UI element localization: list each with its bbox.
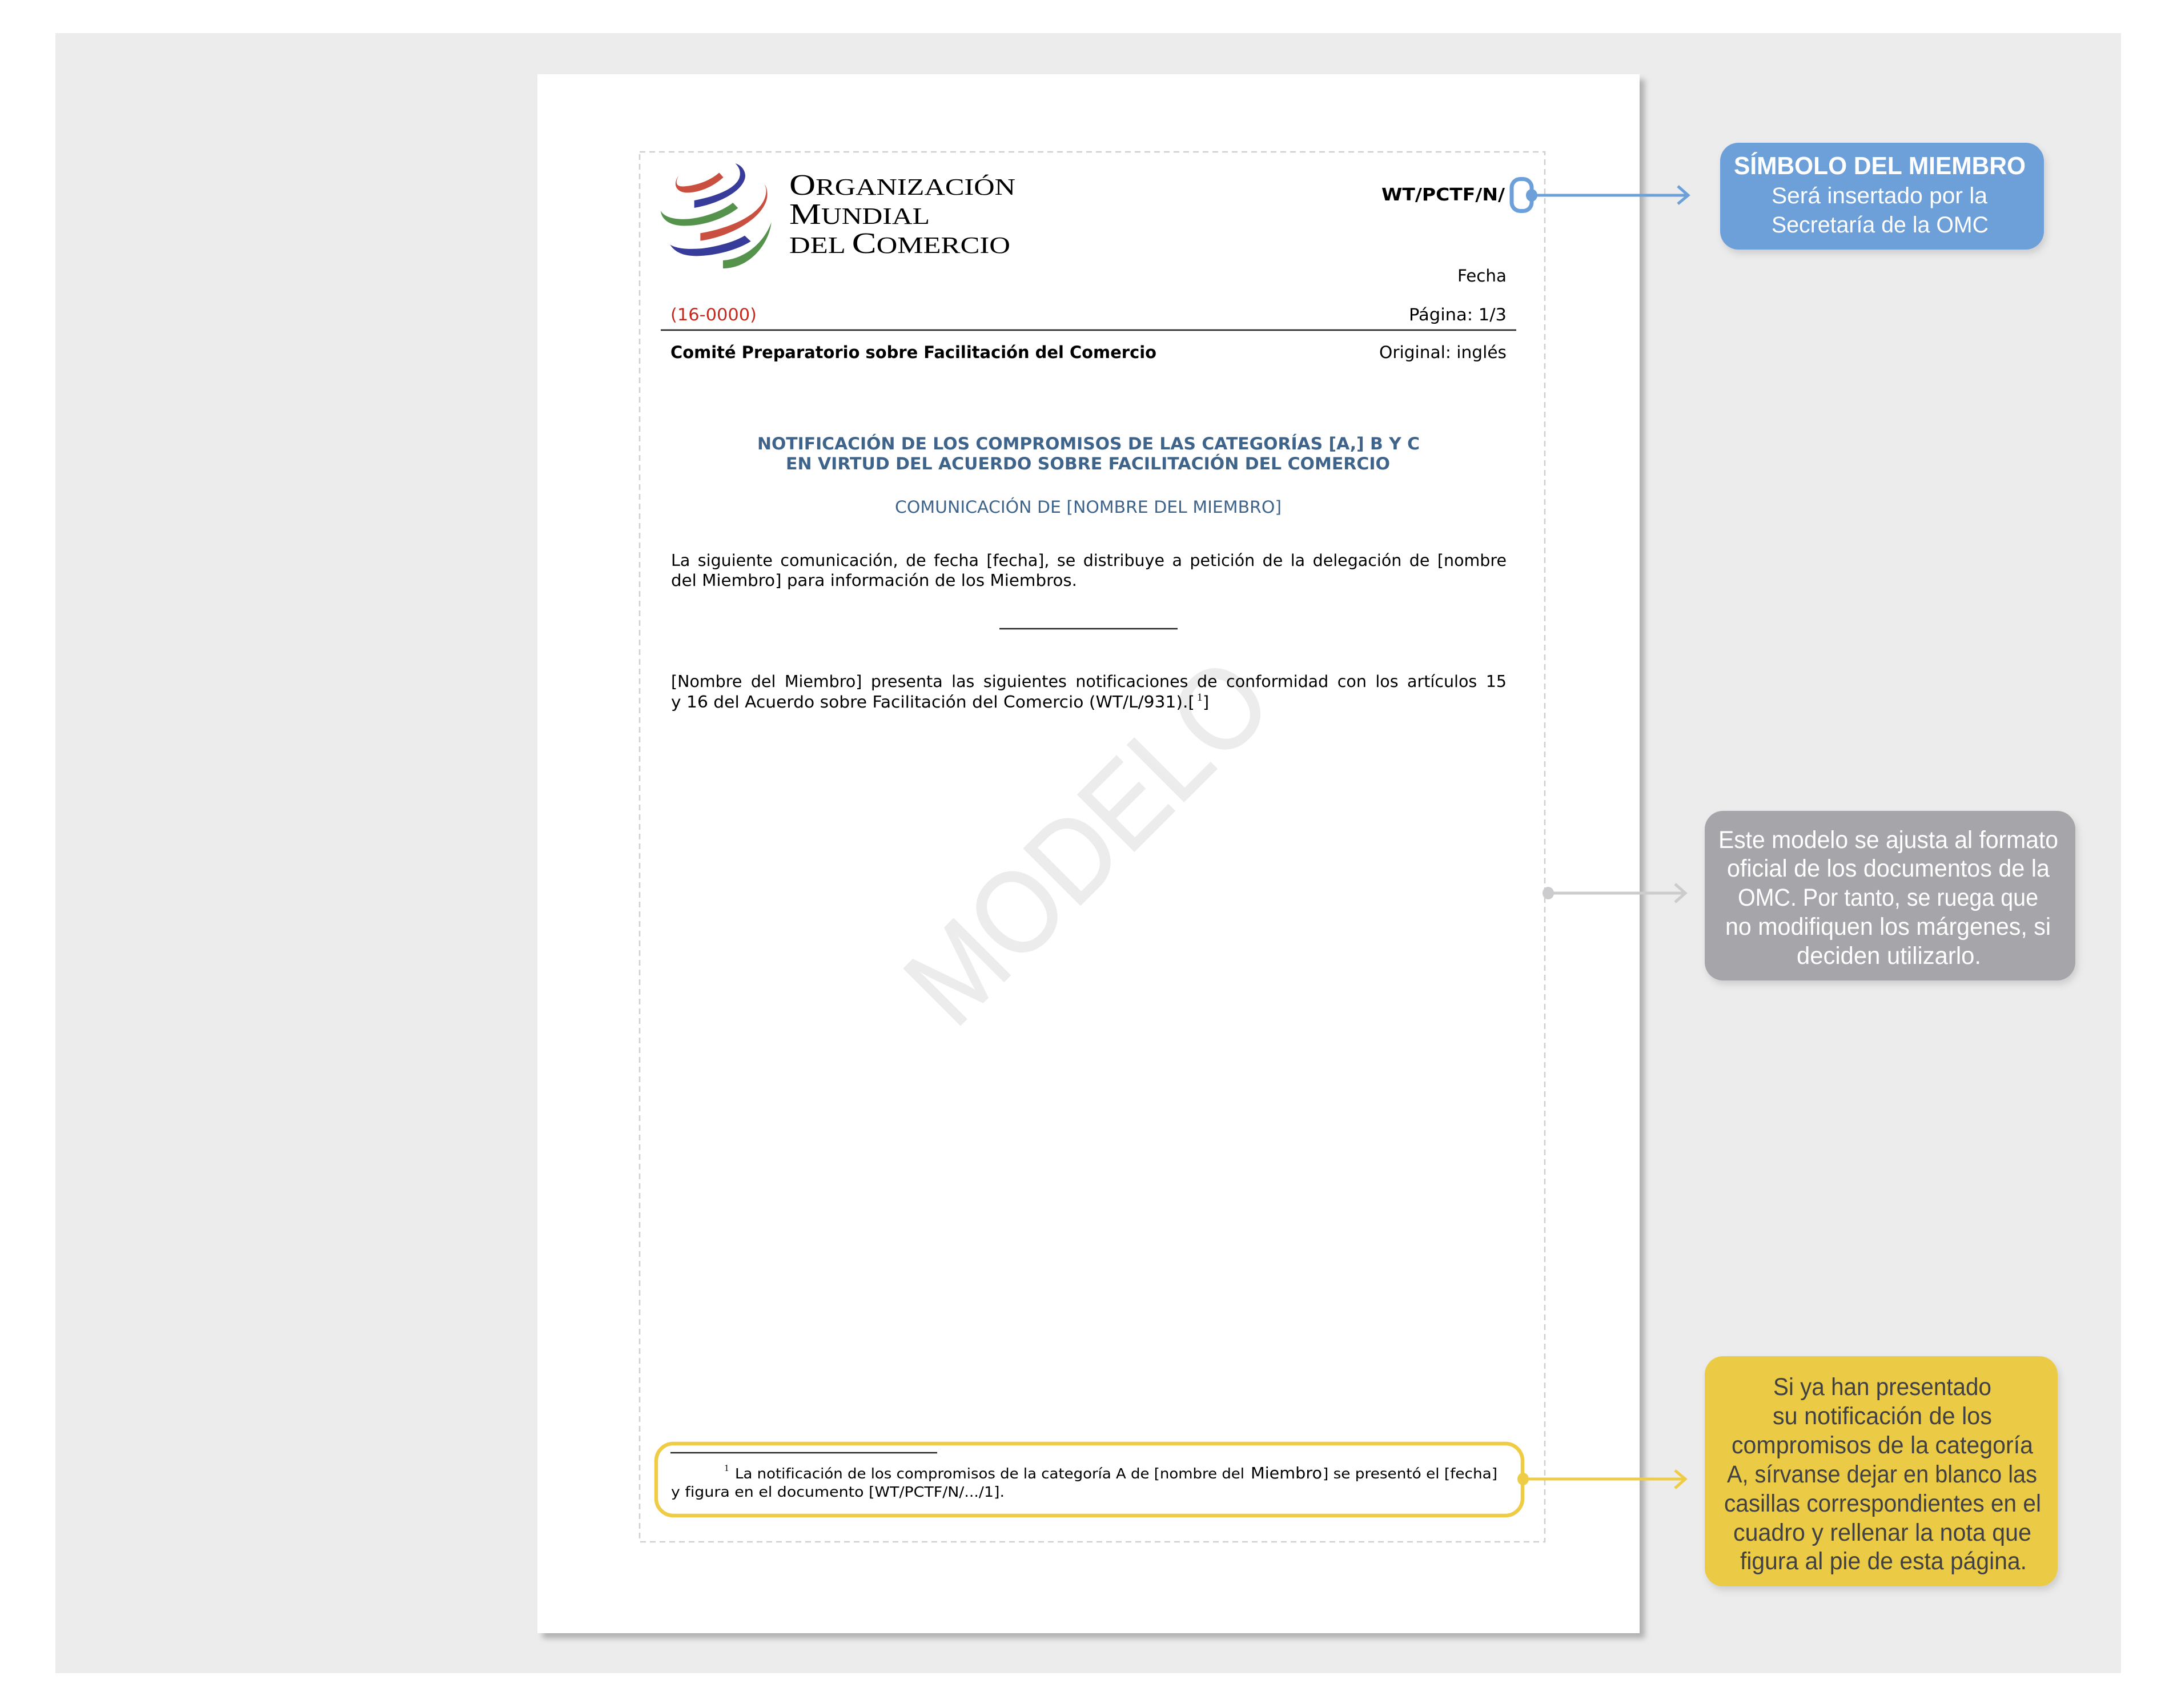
- callout: member symbol: Será insertado por la: [1772, 183, 1988, 208]
- callout: margins note: deciden utilizarlo.: [1797, 942, 1981, 970]
- notification paragraph last line: y 16 del Acuerdo sobre Facilitación del Comercio (WT/L/931).[: [671, 693, 1195, 712]
- callout: category A note: Si ya han presentado: [1773, 1373, 1991, 1401]
- WTO logo: [661, 163, 1015, 268]
- callout: margins note: oficial de los documentos de la: [1727, 855, 2050, 882]
- document title: EN VIRTUD DEL ACUERDO SOBRE FACILITACIÓN DEL COMERCIO: [786, 454, 1390, 473]
- callout: category A note: casillas correspondientes en el: [1724, 1490, 2041, 1517]
- callout: member symbol: Secretaría de la OMC: [1772, 212, 1989, 238]
- notification paragraph last line: ]: [1203, 693, 1209, 712]
- footnote text: y figura en el documento [WT/PCTF/N/.../1].: [671, 1484, 1005, 1500]
- dashed margin frame: [640, 152, 1545, 1542]
- organisation name: ORGANIZACIÓN: [789, 169, 1015, 202]
- notification paragraph last line: 1: [1197, 692, 1203, 704]
- arrow: member symbol bracket to blue callout: [1512, 179, 1688, 211]
- original language: Original: inglés: [1379, 343, 1507, 362]
- organisation name: [789, 169, 1015, 260]
- document symbol: WT/PCTF/N/: [1381, 185, 1505, 205]
- callout: margins note: OMC. Por tanto, se ruega que: [1738, 884, 2038, 911]
- footnote text: [671, 1462, 1497, 1500]
- intro paragraph last line: del Miembro] para información de los Miembros.: [671, 571, 1077, 590]
- footnote text: La notificación de los compromisos de la categoría A de [nombre del: [735, 1465, 1244, 1482]
- callout: category A note: [1705, 1356, 2058, 1586]
- footnote text: ] se presentó el [fecha]: [1323, 1465, 1497, 1482]
- footnote text: 1: [724, 1462, 729, 1473]
- arrow: margin frame to grey callout: [1543, 884, 1685, 902]
- date: Fecha: [1457, 266, 1507, 286]
- watermark: MODELO: MODELO: [880, 634, 1295, 1049]
- callout: margins note: Este modelo se ajusta al formato: [1718, 826, 2058, 854]
- page number: Página: 1/3: [1409, 305, 1507, 324]
- callout: category A note: A, sírvanse dejar en blanco las: [1727, 1461, 2037, 1488]
- footnote highlight box: [656, 1444, 1523, 1516]
- committee name: Comité Preparatorio sobre Facilitación del Comercio: [670, 343, 1156, 362]
- icon: WTO globe ribbons: [661, 163, 772, 268]
- callout: member symbol: [1720, 143, 2044, 250]
- intro paragraph first line: La siguiente comunicación, de fecha [fecha], se distribuye a petición de la delegación de [nombre: [671, 551, 1507, 570]
- callout: category A note: cuadro y rellenar la nota que: [1733, 1519, 2031, 1546]
- callout: margins note: [1705, 811, 2075, 980]
- callout: member symbol: SÍMBOLO DEL MIEMBRO: [1734, 151, 2026, 180]
- document page: [537, 74, 1640, 1633]
- communication subtitle: COMUNICACIÓN DE [NOMBRE DEL MIEMBRO]: [895, 497, 1282, 517]
- callout: category A note: figura al pie de esta página.: [1740, 1548, 2027, 1575]
- arrow: footnote to yellow callout: [1517, 1470, 1685, 1488]
- document title: NOTIFICACIÓN DE LOS COMPROMISOS DE LAS CATEGORÍAS [A,] B Y C: [757, 434, 1420, 453]
- notification paragraph first line: [Nombre del Miembro] presenta las siguientes notificaciones de conformidad con los artículos 15: [671, 672, 1507, 691]
- document number: (16-0000): [670, 305, 757, 324]
- organisation name: DEL COMERCIO: [789, 227, 1010, 260]
- callout: category A note: su notificación de los: [1773, 1402, 1992, 1430]
- callout: category A note: compromisos de la categoría: [1732, 1432, 2033, 1459]
- callout: margins note: no modifiquen los márgenes, si: [1725, 913, 2051, 941]
- organisation name: MUNDIAL: [789, 198, 930, 231]
- document title: [757, 434, 1420, 473]
- footnote text: Miembro: [1251, 1464, 1322, 1482]
